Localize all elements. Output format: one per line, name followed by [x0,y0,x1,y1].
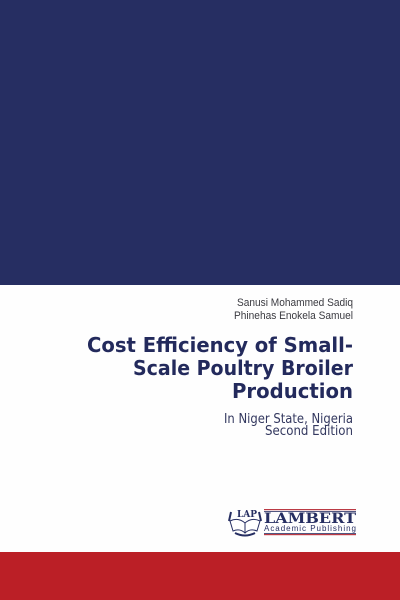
title: Scale Poultry Broiler [133,356,354,380]
authors [234,297,353,322]
logo wordmark LAMBERT: LAMBERT [264,511,356,527]
authors: Sanusi Mohammed Sadiq [237,297,353,309]
icon: LAP open book with laurel: LAP [237,510,257,520]
title [87,333,354,403]
subtitle [224,412,353,439]
subtitle: In Niger State, Nigeria [224,412,353,427]
panel: navy top cover block [0,0,400,285]
logo tagline: Academic Publishing [264,524,356,533]
logo bottom rules [264,533,356,535]
title: Cost Efficiency of Small- [87,333,353,357]
publisher logo [229,509,356,536]
title: Production [232,379,353,403]
authors: Phinehas Enokela Samuel [234,310,353,322]
panel: red bottom band [0,552,400,600]
subtitle: Second Edition [265,424,353,439]
logo top rules [264,509,356,512]
